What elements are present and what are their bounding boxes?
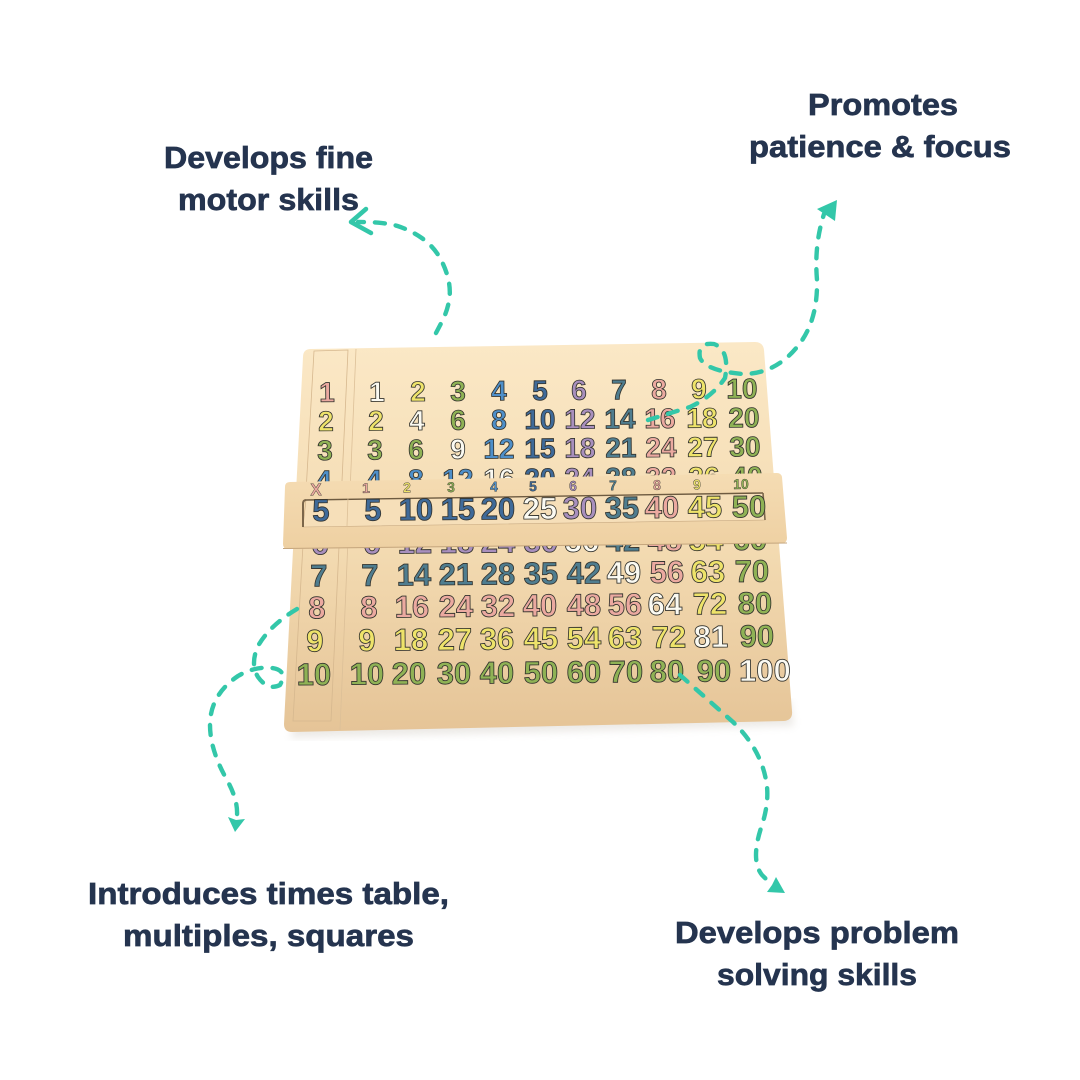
row 9: 81 — [693, 619, 728, 654]
row 4: 8 — [408, 464, 424, 495]
row 2: 16 — [644, 403, 676, 434]
row 1: 4 — [491, 375, 507, 406]
slider header numbers: 9 — [693, 476, 701, 492]
row 6: 6 — [311, 526, 329, 561]
slider row of five times table: 35 — [605, 490, 639, 525]
row 3: 21 — [605, 432, 637, 463]
number grid — [297, 373, 791, 692]
row 1: 5 — [532, 375, 548, 406]
row 4: 36 — [688, 461, 720, 493]
row 7: 7 — [310, 558, 328, 593]
slider row of five times table: 25 — [523, 491, 557, 526]
row 9: 27 — [437, 622, 472, 657]
row 7: 42 — [566, 555, 601, 591]
slider row of five times table: 5 — [312, 493, 330, 528]
row 1: 2 — [410, 376, 426, 407]
row 7: 49 — [606, 555, 641, 590]
row 2: 8 — [491, 404, 507, 435]
row 1: 3 — [450, 376, 466, 407]
row 10: 30 — [437, 656, 471, 691]
wooden times table board — [284, 342, 792, 732]
heading: patience and focus — [749, 87, 1011, 164]
row 7: 14 — [396, 557, 432, 592]
slider header numbers: 7 — [609, 477, 617, 493]
arrow: to times table — [210, 609, 297, 832]
slider row of five times table: 40 — [645, 490, 679, 525]
slider row of five times table — [312, 489, 766, 528]
row 9: 36 — [479, 621, 514, 657]
slider header numbers: 6 — [569, 478, 577, 494]
slider strip — [283, 473, 787, 549]
row 8: 80 — [737, 586, 772, 621]
row 4: 24 — [564, 463, 596, 494]
row 3: 3 — [367, 434, 383, 466]
row 4: 20 — [524, 463, 556, 494]
heading: patience and focus: patience & focus — [749, 129, 1011, 164]
heading: problem solving — [675, 915, 959, 992]
row 2: 2 — [318, 406, 334, 437]
heading: problem solving: solving skills — [717, 957, 917, 992]
row 1 — [319, 373, 758, 408]
row 8 — [308, 586, 772, 625]
row 8: 16 — [394, 589, 429, 625]
slider header numbers: 5 — [529, 478, 537, 494]
row 9: 72 — [651, 619, 686, 655]
row 3: 18 — [564, 433, 596, 464]
row 1: 1 — [319, 377, 335, 408]
row 1: 8 — [651, 374, 667, 405]
row 8: 72 — [692, 586, 727, 621]
row 8: 48 — [566, 587, 601, 623]
row 4: 12 — [442, 464, 474, 495]
row 4: 40 — [731, 461, 763, 492]
row 6: 30 — [523, 524, 558, 559]
heading: problem solving: Develops problem — [675, 915, 959, 950]
row 3: 15 — [524, 433, 556, 464]
row 4: 4 — [316, 465, 332, 496]
heading: times table: multiples, squares — [123, 918, 414, 953]
row 10 — [297, 653, 791, 692]
row 1: 9 — [691, 374, 707, 405]
row 2 — [318, 402, 760, 437]
slider header numbers: 4 — [490, 478, 498, 495]
row 7: 7 — [361, 558, 379, 593]
row 6: 6 — [363, 526, 381, 561]
row 10: 80 — [650, 654, 684, 689]
row 6: 12 — [397, 525, 432, 560]
heading: fine motor skills: Develops fine — [164, 140, 373, 175]
slider row of five times table: 10 — [399, 492, 433, 527]
row 9: 63 — [607, 620, 642, 655]
row 8: 64 — [647, 587, 683, 622]
row 1: 6 — [571, 375, 587, 406]
heading: fine motor skills — [164, 140, 373, 217]
row 3: 3 — [317, 435, 333, 466]
slider header numbers: 1 — [362, 480, 370, 496]
row 3: 12 — [483, 433, 515, 464]
row 4: 28 — [605, 462, 637, 493]
row 9: 54 — [566, 620, 602, 656]
slider header numbers: X — [310, 480, 322, 499]
row 6: 60 — [732, 522, 767, 557]
heading: times table: Introduces times table, — [88, 876, 449, 911]
row 8: 24 — [438, 589, 474, 624]
row 8: 8 — [308, 590, 326, 625]
row 4: 32 — [645, 462, 677, 493]
row 8: 8 — [360, 590, 378, 625]
row 6: 24 — [480, 524, 516, 560]
row 8: 40 — [522, 588, 557, 623]
row 7: 63 — [690, 554, 725, 589]
heading: fine motor skills: motor skills — [178, 182, 359, 217]
row 6: 18 — [439, 525, 474, 560]
row 9: 18 — [393, 622, 428, 658]
slider header numbers: 3 — [447, 479, 455, 495]
arrow: to problem solving — [680, 675, 785, 893]
row 3: 27 — [687, 431, 719, 463]
row 10: 20 — [392, 656, 426, 691]
slider row of five times table: 20 — [481, 491, 515, 527]
slider header numbers: 10 — [733, 476, 749, 492]
slider header numbers: 2 — [403, 479, 411, 495]
row 10: 40 — [480, 655, 514, 691]
row 3 — [317, 431, 761, 466]
row 2: 18 — [686, 402, 718, 434]
row 10: 90 — [697, 653, 731, 689]
row 3: 9 — [450, 434, 466, 465]
row 9: 9 — [358, 623, 376, 658]
row 2: 2 — [368, 405, 384, 436]
row 6 — [311, 522, 767, 561]
slider header numbers — [310, 476, 749, 499]
row 7: 56 — [649, 554, 684, 590]
row 10: 10 — [297, 657, 331, 692]
row 2: 20 — [728, 402, 760, 433]
slider row of five times table: 50 — [732, 489, 766, 524]
arrow: to fine motor skills — [351, 209, 450, 333]
row 9: 9 — [306, 623, 324, 658]
slider window — [303, 493, 765, 527]
row 2: 10 — [524, 404, 556, 435]
row 2: 6 — [450, 405, 466, 436]
row 2: 14 — [604, 403, 636, 434]
row 10: 60 — [567, 654, 601, 690]
row 4: 4 — [366, 464, 382, 496]
row 10: 70 — [609, 654, 643, 689]
row 6: 54 — [688, 522, 724, 557]
row 4: 16 — [483, 463, 515, 494]
row 9: 90 — [739, 619, 774, 654]
slider header numbers: 8 — [653, 477, 661, 493]
row 9: 45 — [523, 621, 558, 656]
row 1: 10 — [726, 373, 758, 404]
row 6: 36 — [564, 523, 599, 559]
row 3: 6 — [408, 434, 424, 465]
row 3: 30 — [729, 431, 761, 462]
arrow: to patience and focus — [648, 200, 837, 420]
row 1: 7 — [611, 374, 627, 405]
row 7: 21 — [438, 557, 473, 592]
row 7: 70 — [734, 554, 769, 589]
row 7 — [310, 554, 769, 593]
row 7: 35 — [523, 556, 558, 591]
row 10: 100 — [739, 653, 791, 688]
slider row of five times table: 30 — [563, 491, 597, 526]
row 1: 1 — [369, 376, 385, 407]
row 2: 12 — [564, 404, 596, 435]
board shadow — [290, 700, 794, 738]
row 9 — [306, 619, 774, 658]
row 4 — [316, 461, 763, 496]
row 10: 10 — [350, 656, 384, 692]
row 10: 50 — [524, 655, 558, 690]
row 6: 48 — [647, 523, 682, 558]
slider row of five times table: 45 — [688, 489, 722, 525]
heading: patience and focus: Promotes — [808, 87, 958, 122]
slider row of five times table: 15 — [441, 492, 475, 527]
row 3: 24 — [645, 432, 677, 463]
slider row of five times table: 5 — [364, 492, 382, 528]
row 8: 56 — [607, 587, 642, 622]
row 8: 32 — [480, 588, 515, 624]
row 7: 28 — [480, 556, 515, 592]
row 2: 4 — [409, 405, 425, 436]
heading: times table — [88, 876, 449, 953]
row 6: 42 — [605, 523, 640, 558]
